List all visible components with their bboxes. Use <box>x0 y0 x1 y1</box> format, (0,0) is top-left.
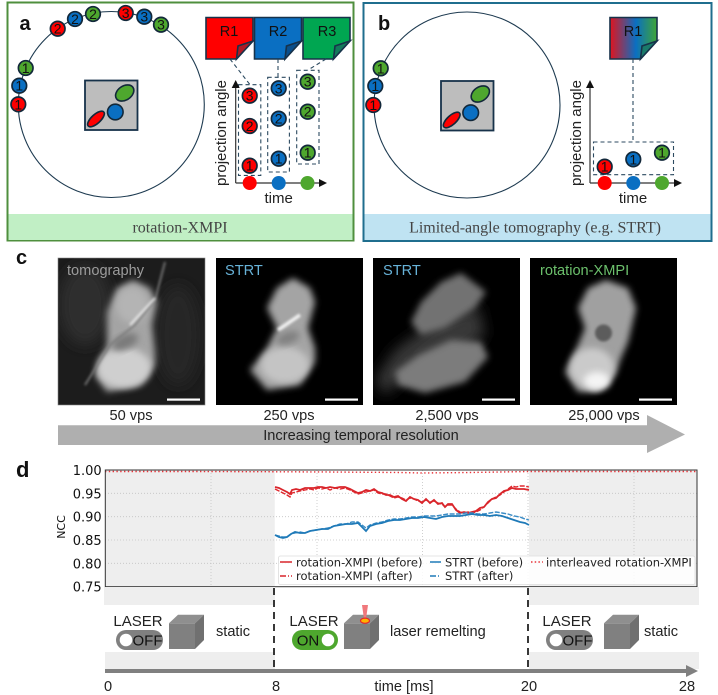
image label tomography: tomography <box>67 263 145 279</box>
cube icon <box>604 615 639 649</box>
measurement dots a: 1 <box>304 145 312 161</box>
time axis labels: 20 <box>521 679 537 695</box>
image label rotation-XMPI: rotation-XMPI <box>540 263 629 279</box>
orbit circle b <box>374 12 560 198</box>
laser off state right <box>542 613 678 650</box>
y tick labels: 0.95 <box>73 488 102 502</box>
arrow: increasing temporal resolution <box>58 415 685 453</box>
dashed transition lines <box>274 588 528 667</box>
projection dots on orbit a: 2 <box>89 6 97 22</box>
projection dots on orbit b: 1 <box>371 78 379 94</box>
laser on state middle <box>289 605 486 650</box>
image: rotation-XMPI 25,000 vps <box>530 258 677 405</box>
reconstruction R1 gradient: R1 <box>624 24 642 40</box>
scale bar <box>325 398 358 401</box>
image: STRT 2,500 vps <box>373 258 520 405</box>
axes b <box>586 80 682 190</box>
label static: static <box>644 624 678 640</box>
projection dots on orbit a: 1 <box>15 78 23 94</box>
legend: rotation-XMPI (after) <box>296 569 413 583</box>
time axis labels: 28 <box>679 679 695 695</box>
label 250 vps: 250 vps <box>263 408 315 424</box>
cube icon <box>169 615 204 649</box>
cube icon with melt pool <box>344 615 379 649</box>
measurement dots a <box>242 74 315 174</box>
reconstruction R2: R2 <box>269 24 287 40</box>
image: STRT 250 vps <box>216 258 363 405</box>
time axis arrow <box>105 665 698 677</box>
measurement dots a: 2 <box>246 118 254 134</box>
laser off state left: LASER <box>113 613 163 630</box>
caption band b <box>364 214 710 240</box>
series: STRT after <box>275 512 529 537</box>
projection dots on orbit a: 3 <box>122 5 130 21</box>
time axis labels: time [ms] <box>374 679 434 695</box>
legend: interleaved rotation-XMPI <box>546 556 692 570</box>
measurement dots a: 3 <box>304 74 312 90</box>
projection dots on orbit a: 1 <box>22 60 30 76</box>
caption band a <box>8 214 352 240</box>
time axis labels: 8 <box>272 679 280 695</box>
sample square a <box>85 80 138 130</box>
legend: STRT (after) <box>445 569 513 583</box>
measurement dots a: 2 <box>275 111 283 127</box>
reconstruction R1 gradient <box>610 18 657 59</box>
image label STRT: STRT <box>383 263 421 279</box>
measurement dots b: 1 <box>658 145 666 161</box>
projection dots on orbit b <box>366 60 388 113</box>
label d: d <box>16 457 29 482</box>
projection dots on orbit a <box>11 5 168 112</box>
orbit circle a <box>18 12 204 198</box>
scale bar <box>167 398 200 401</box>
projection dots on orbit a: 2 <box>71 11 79 27</box>
y tick labels: 0.85 <box>73 534 102 549</box>
toggle off: OFF <box>132 632 162 650</box>
y axis label: NCC <box>55 515 68 539</box>
measurement dots b: 1 <box>629 151 637 167</box>
dashed group b <box>594 59 674 175</box>
legend <box>278 556 695 584</box>
y tick labels: 1.00 <box>73 464 102 479</box>
image label STRT: STRT <box>225 263 263 279</box>
y tick labels <box>73 464 102 596</box>
axis label projection angle a: projection angle <box>213 80 230 186</box>
series: rotation-XMPI after <box>275 486 529 513</box>
label 50 vps: 50 vps <box>110 408 152 424</box>
plot frame <box>105 470 697 587</box>
measurement dots a: 1 <box>275 151 283 167</box>
legend: STRT (before) <box>445 556 523 570</box>
projection dots on orbit a: 1 <box>14 96 22 112</box>
laser on state middle: LASER <box>289 613 339 630</box>
series: STRT before <box>275 514 529 538</box>
y tick labels: 0.90 <box>73 510 102 526</box>
projection dots on orbit b: 1 <box>369 97 377 113</box>
label c: c <box>16 247 27 269</box>
measurement dots b <box>597 145 669 175</box>
axes a <box>232 80 327 190</box>
caption band a: rotation-XMPI <box>132 220 228 236</box>
panel a: rotation-XMPI schematic <box>8 2 354 240</box>
measurement dots a: 3 <box>275 80 283 96</box>
laser beam and melt pool <box>360 605 370 623</box>
reconstruction R3: R3 <box>318 24 336 40</box>
time axis labels <box>104 679 695 695</box>
measurement dots a: 1 <box>246 158 254 174</box>
toggle off: OFF <box>562 632 592 650</box>
reconstruction R1: R1 <box>220 24 238 40</box>
image: tomography 50 vps <box>58 258 205 405</box>
label b: b <box>378 13 390 35</box>
projection dots on orbit a: 3 <box>157 17 165 33</box>
reconstruction R1 <box>206 18 253 59</box>
reconstruction R3 <box>303 18 350 59</box>
y tick labels: 0.80 <box>73 558 102 572</box>
time axis labels: 0 <box>104 679 112 695</box>
panel b: limited-angle tomography schematic <box>364 3 712 241</box>
projection dots on orbit a: 3 <box>140 9 148 25</box>
projection dots on orbit b: 1 <box>377 60 385 76</box>
laser off state left <box>113 613 250 650</box>
toggle on <box>292 630 338 650</box>
measurement dots a: 2 <box>304 104 312 120</box>
caption band b: Limited-angle tomography (e.g. STRT) <box>409 220 661 236</box>
laser off state right: LASER <box>542 613 592 630</box>
measurement dots a: 3 <box>246 88 254 104</box>
label a: a <box>20 13 32 35</box>
projection dots on orbit a: 2 <box>54 21 62 37</box>
label laser remelting: laser remelting <box>390 624 486 640</box>
sample square b <box>441 81 494 130</box>
legend: rotation-XMPI (before) <box>296 556 422 570</box>
toggle on: ON <box>297 632 319 650</box>
label 2,500 vps: 2,500 vps <box>415 408 479 424</box>
chart: NCC over time <box>55 464 697 596</box>
label static: static <box>216 624 250 640</box>
axis label time b: time <box>619 190 647 207</box>
timeline gray bands <box>104 587 699 669</box>
scale bar <box>482 398 515 401</box>
series: rotation-XMPI before <box>275 487 529 513</box>
series: interleaved rotation-XMPI <box>105 472 697 473</box>
dashed groups a <box>230 59 326 175</box>
measurement dots b: 1 <box>601 159 609 175</box>
reconstruction R2 <box>254 18 302 59</box>
scale bar <box>639 398 672 401</box>
axis label time a: time <box>265 190 293 207</box>
axis label projection angle b: projection angle <box>568 80 585 186</box>
arrow: increasing temporal resolution: Increasing temporal resolution <box>263 428 459 444</box>
y tick labels: 0.75 <box>73 580 102 596</box>
label 25,000 vps: 25,000 vps <box>568 408 640 424</box>
